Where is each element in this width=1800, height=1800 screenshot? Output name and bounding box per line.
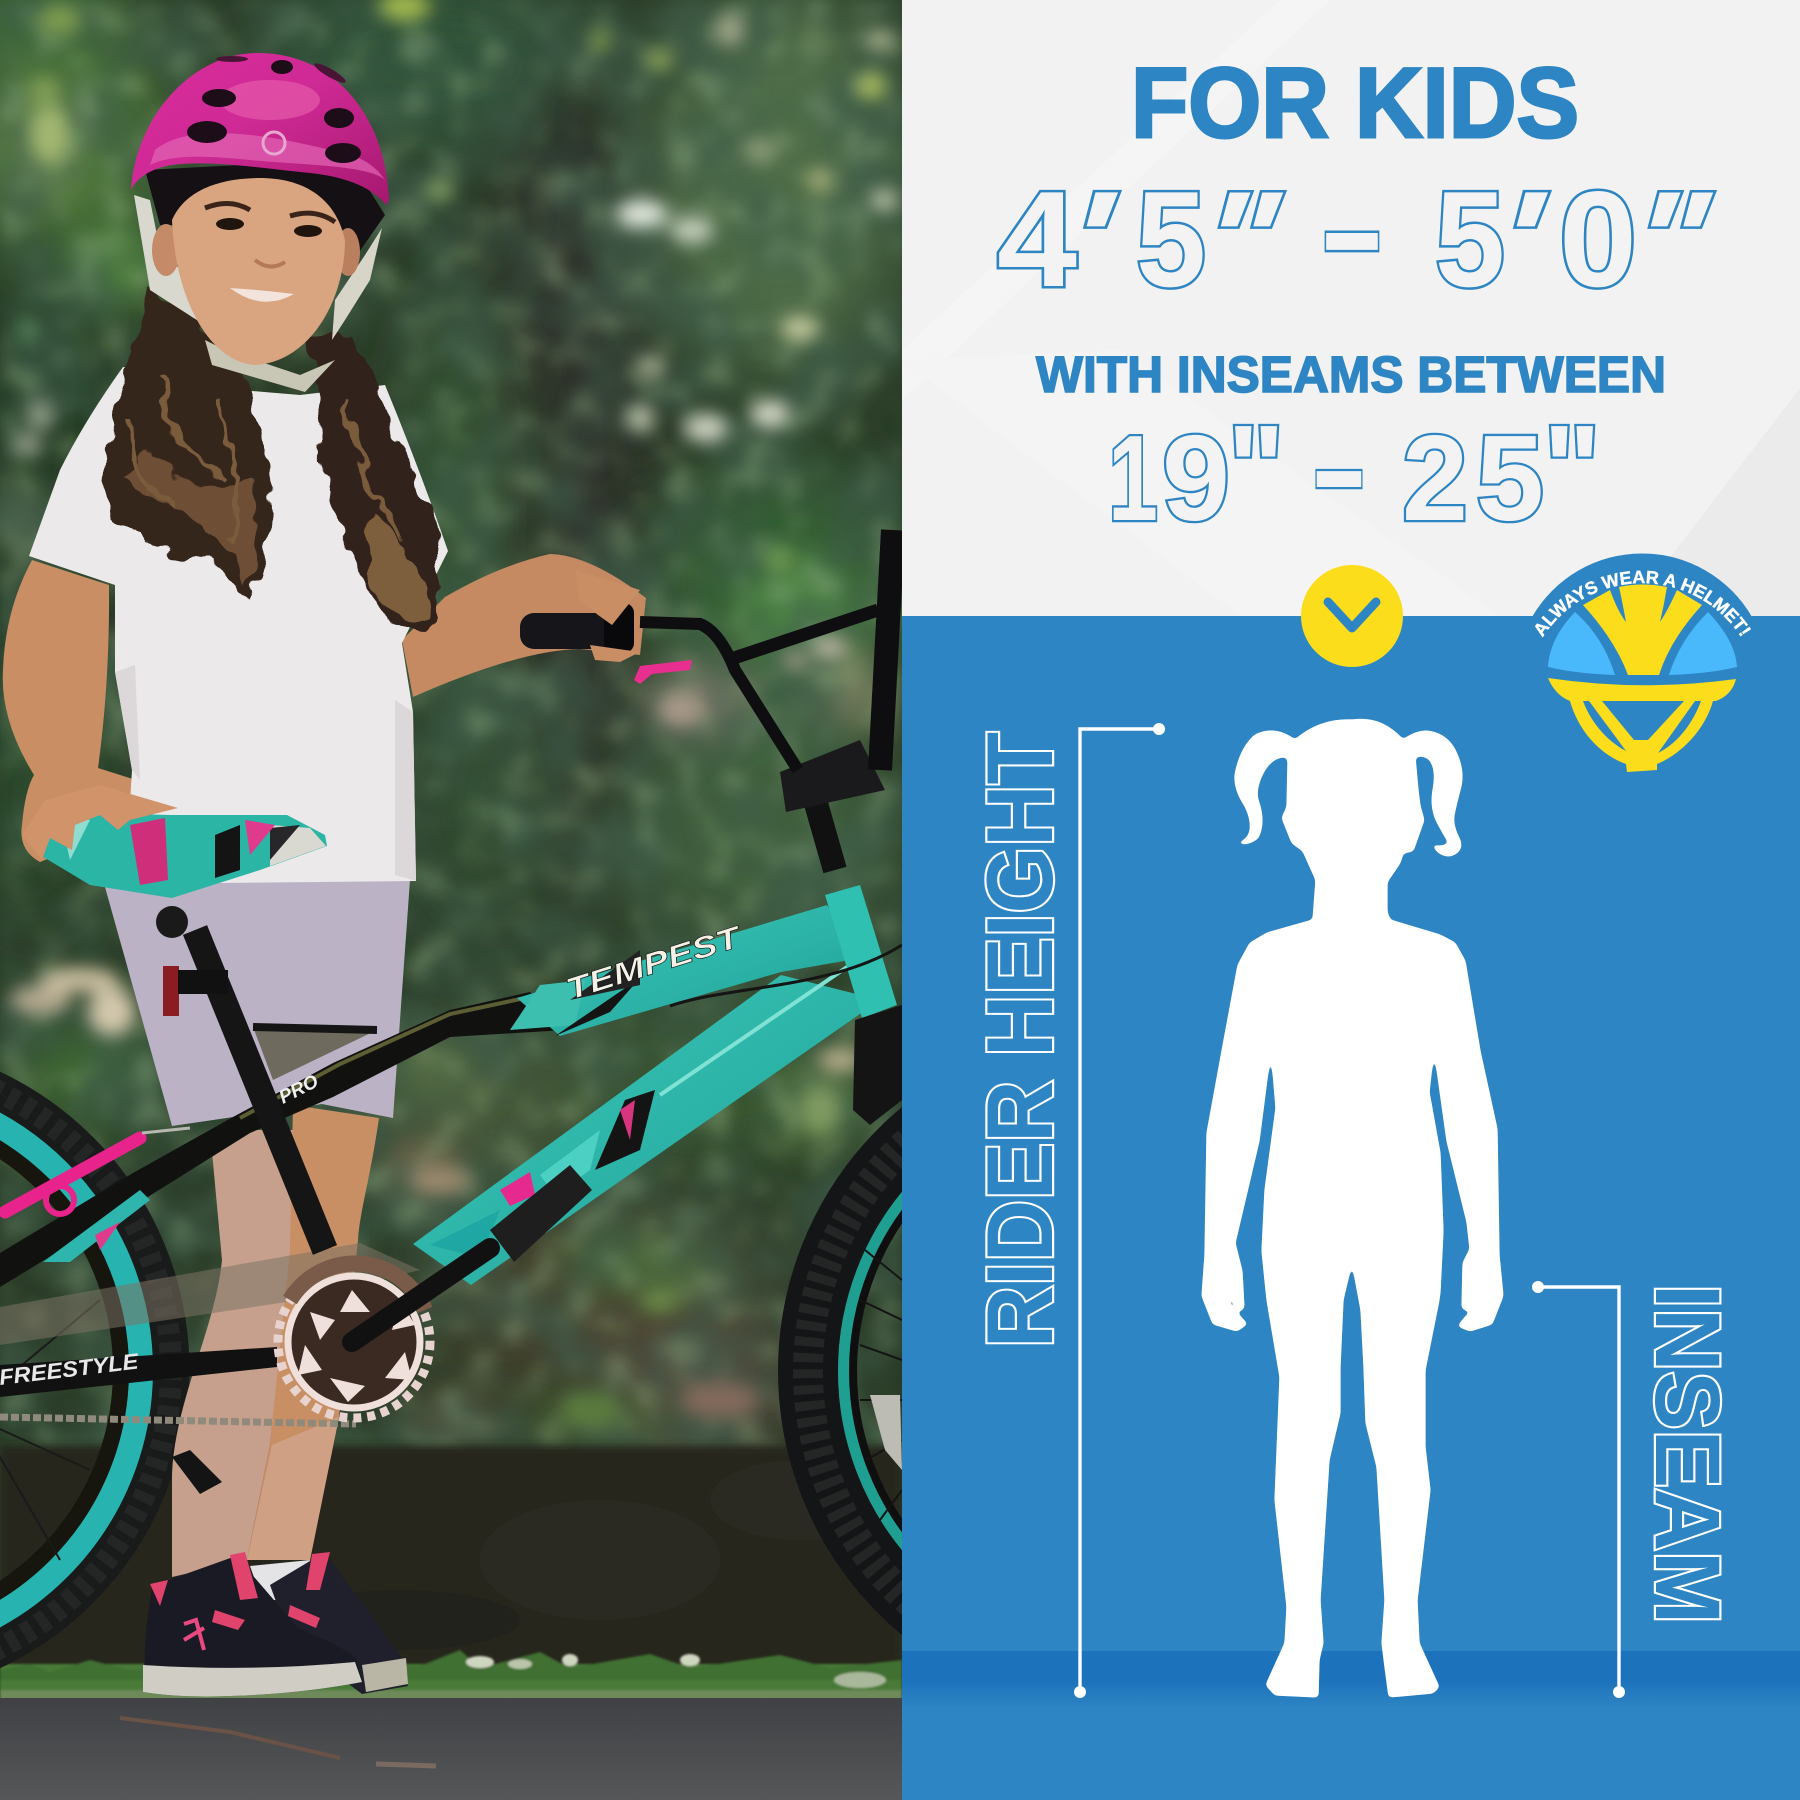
bike: crank arm — [352, 1248, 490, 1342]
panel: blue rider diagram — [902, 616, 1800, 1800]
height range: 4'5" - 5'0": 5 — [1136, 163, 1206, 315]
bike: stem tube — [815, 800, 835, 870]
girl: long curly hair — [104, 292, 441, 630]
bike: sprocket — [278, 1263, 430, 1418]
helmet: yellow lower band and straps — [1548, 678, 1736, 772]
bike: PRO decal: PRO — [276, 1071, 322, 1108]
bike: pink brake lever — [634, 660, 692, 684]
girl: pink helmet — [131, 53, 389, 205]
front wheel — [778, 1107, 902, 1635]
rear wheel — [0, 1059, 171, 1681]
badge dome background — [1532, 553, 1752, 617]
bike: FREESTYLE decal: FREESTYLE — [0, 1348, 141, 1390]
bike: rear brake in pink — [5, 1128, 190, 1214]
bike: front fork — [853, 1005, 902, 1125]
bike: handlebar stem block — [780, 740, 885, 812]
bike: brake cable — [670, 945, 902, 1006]
girl: helmet straps — [134, 195, 382, 392]
subheading: WITH INSEAMS BETWEEN: WITH INSEAMS BETWEEN — [1036, 346, 1666, 403]
height range: 4'5" - 5'0": ' — [1046, 164, 1136, 315]
inseam range: 19" - 25" — [1108, 377, 1601, 556]
icon: yellow chevron circle — [1301, 565, 1403, 667]
inseam range: 19" - 25": 1 — [1108, 410, 1158, 546]
height range: 4'5" - 5'0": – — [1323, 134, 1381, 324]
height range: 4'5" - 5'0": 4 — [997, 163, 1077, 315]
height range: 4'5" - 5'0" — [997, 134, 1733, 324]
bike: down tube graphics — [430, 1090, 655, 1258]
helmet: center strap opening — [1602, 701, 1684, 740]
grass strip — [0, 1650, 902, 1702]
bike: pedal — [490, 1165, 592, 1262]
inseam range: 19" - 25": 5 — [1476, 410, 1544, 546]
girl: socks — [250, 1560, 310, 1600]
rider height bracket line — [1074, 723, 1165, 1698]
panel: light sizing header — [902, 0, 1800, 616]
height range: 4'5" - 5'0": 0 — [1559, 163, 1637, 315]
height range: 4'5" - 5'0": " — [1180, 163, 1303, 315]
bike: handlebar grip — [520, 613, 612, 649]
bike: saddle clamp — [156, 906, 228, 1016]
bike: seat tube — [195, 930, 325, 1250]
bike: top tube graphics — [510, 950, 640, 1036]
helmet: light blue side panels — [1548, 612, 1737, 675]
bike: chain — [0, 1417, 356, 1424]
badge: curved slogan: ALWAYS WEAR A HELMET! — [1535, 570, 1751, 638]
asphalt path with twig — [0, 1698, 902, 1800]
photo background: blurred forest foliage — [0, 0, 910, 1800]
girl: white ribbed t-shirt — [29, 367, 448, 884]
inseam range: 19" - 25": " — [1543, 400, 1601, 536]
girl: left arm and hand on saddle — [2, 560, 132, 862]
badge: always wear a helmet — [1532, 554, 1752, 772]
inseam bracket line — [1532, 1281, 1625, 1698]
inseam range: 19" - 25": – — [1314, 377, 1364, 556]
girl: right arm and hand on grip — [402, 554, 646, 697]
girl: shoes — [143, 1552, 408, 1696]
height range: 4'5" - 5'0": ' — [1476, 164, 1566, 315]
label: INSEAM: INSEAM — [1636, 1284, 1738, 1624]
girl: face — [152, 178, 360, 365]
photo: girl standing with teal bike in a park — [0, 0, 902, 1800]
inseam range: 19" - 25": 9 — [1162, 410, 1230, 546]
girl: fingers over saddle — [22, 785, 178, 860]
helmet: yellow crown — [1583, 584, 1702, 675]
label: RIDER HEIGHT: RIDER HEIGHT — [967, 732, 1072, 1348]
stone wall behind grass — [0, 1446, 902, 1671]
bike: brand text TEMPEST: TEMPEST — [562, 920, 747, 1007]
bike: lower-left pedal — [172, 1450, 222, 1494]
bike: mesh seat guard under top tube — [253, 1027, 377, 1080]
heading: FOR KIDS: FOR KIDS — [1131, 47, 1579, 158]
bike: saddle — [40, 812, 327, 898]
inseam range: 19" - 25": 2 — [1402, 410, 1468, 546]
bike: handlebar tubes — [640, 530, 893, 770]
bike: teal down tube — [413, 975, 880, 1285]
bike: head tube — [825, 885, 897, 1018]
helmet: left strap slit — [1583, 701, 1626, 751]
bike: grip collar — [604, 603, 634, 653]
girl: lavender shorts — [103, 880, 410, 1126]
helmet: right strap slit — [1658, 701, 1701, 753]
bike: seat stays and top tube black — [0, 992, 565, 1287]
girl: dark hair under helmet — [145, 165, 385, 258]
silhouette: girl with pigtails — [1202, 719, 1503, 1697]
height range: 4'5" - 5'0": 5 — [1435, 163, 1505, 315]
inseam range: 19" - 25": " — [1227, 400, 1285, 536]
girl: shirt shading — [115, 665, 416, 881]
bike: chain guard — [0, 1243, 420, 1345]
girl: legs — [172, 1105, 379, 1577]
girl: fingers over grip — [575, 570, 640, 662]
bike: lower chain stay — [0, 1347, 277, 1397]
bike: teal top tube — [517, 905, 861, 1036]
height range: 4'5" - 5'0": " — [1610, 163, 1733, 315]
bike: down tube highlight — [660, 965, 850, 1095]
